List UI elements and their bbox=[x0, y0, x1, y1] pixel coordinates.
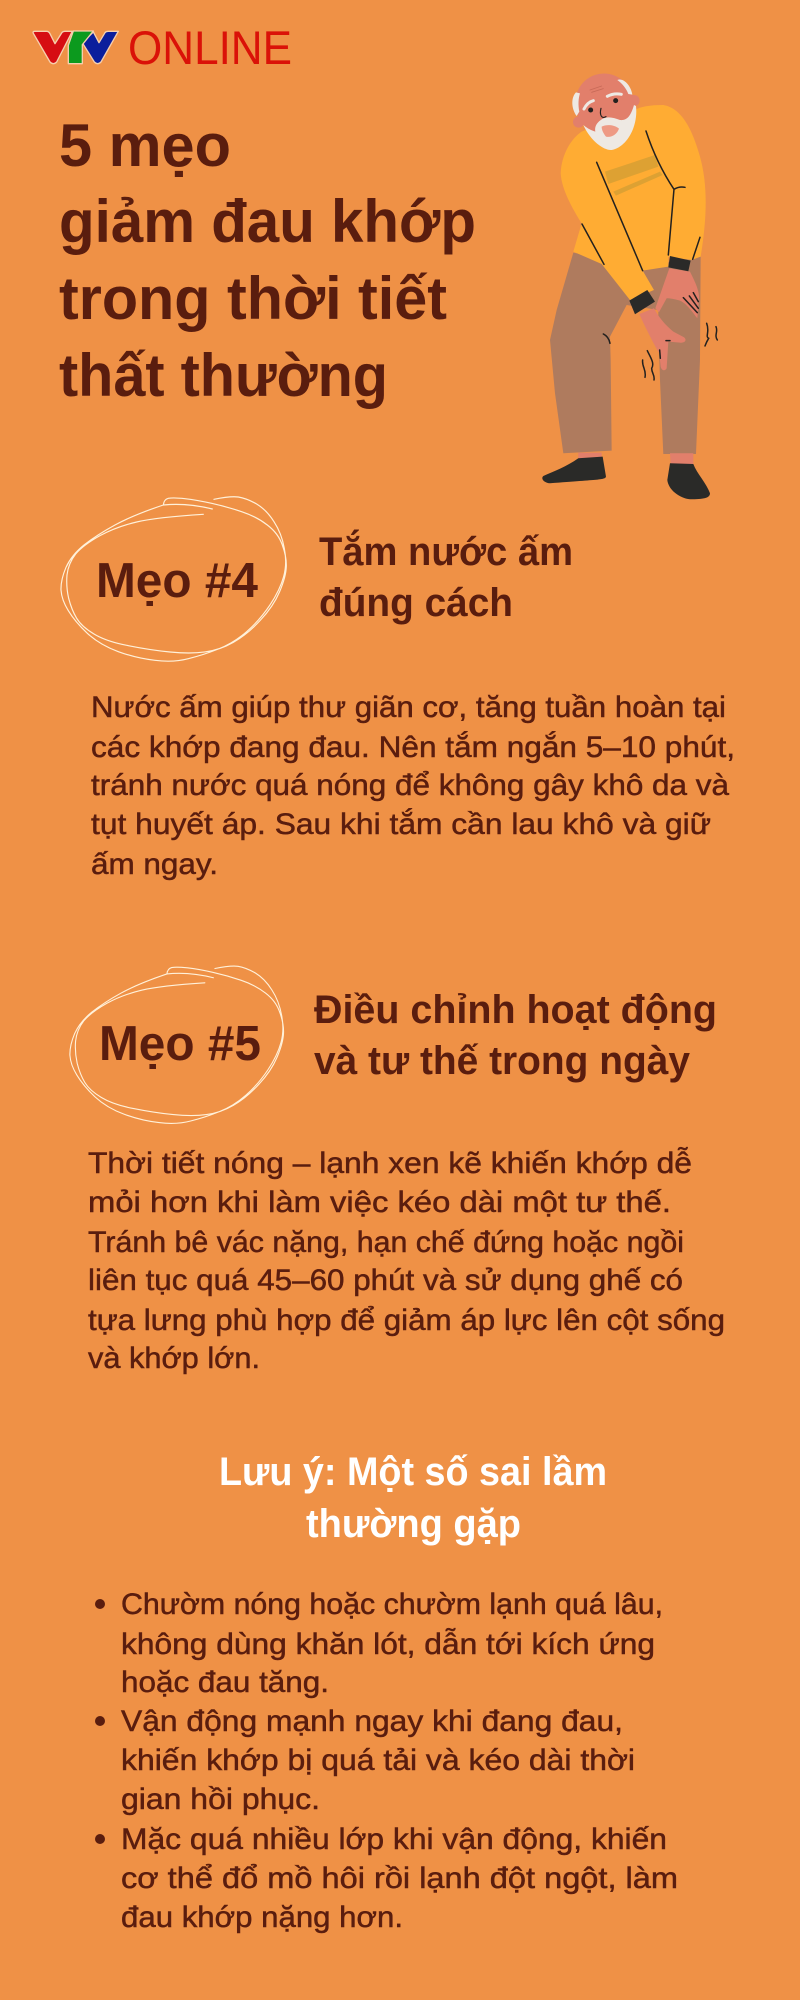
heading bbox=[219, 1450, 607, 1546]
tip text: và khớp lớn. bbox=[88, 1342, 260, 1375]
tip heading: và tư thế trong ngày bbox=[314, 1039, 691, 1083]
ankles bbox=[578, 453, 693, 465]
tip text: tựa lưng phù hợp để giảm áp lực lên cột sống bbox=[88, 1304, 725, 1337]
bullet 1: Chườm nóng hoặc chườm lạnh quá lâu, bbox=[121, 1588, 663, 1621]
tip text: mỏi hơn khi làm việc kéo dài một tư thế. bbox=[88, 1186, 671, 1219]
heading: Lưu ý: Một số sai lầm bbox=[219, 1450, 607, 1494]
trousers bbox=[550, 253, 701, 454]
tip heading bbox=[314, 988, 717, 1083]
tip text: các khớp đang đau. Nên tắm ngắn 5–10 phút, bbox=[91, 731, 735, 764]
tip text: liên tục quá 45–60 phút và sử dụng ghế có bbox=[88, 1264, 683, 1297]
wordmark: ONLINE bbox=[128, 21, 292, 74]
pain marks bbox=[603, 293, 717, 380]
panel: common mistakes bbox=[95, 1450, 678, 1934]
ears bbox=[573, 116, 584, 128]
cuffs bbox=[629, 256, 691, 314]
bullet 2 bbox=[95, 1705, 635, 1816]
icon: VTV mark bbox=[33, 31, 118, 64]
title: trong thời tiết bbox=[59, 265, 447, 332]
tip label: Mẹo #5 bbox=[99, 1017, 261, 1071]
tip text: tụt huyết áp. Sau khi tắm cần lau khô và giữ bbox=[91, 808, 711, 841]
tip text bbox=[88, 1147, 725, 1375]
tip text: Nước ấm giúp thư giãn cơ, tăng tuần hoàn tại bbox=[91, 691, 726, 724]
forehead wrinkles bbox=[590, 86, 603, 92]
head bbox=[567, 66, 642, 150]
bullet 1 bbox=[95, 1588, 663, 1699]
heading: thường gặp bbox=[306, 1502, 521, 1546]
title: thất thường bbox=[59, 342, 388, 409]
lower hand bbox=[639, 308, 686, 370]
eyes bbox=[588, 107, 593, 112]
panel: tip 4 bbox=[61, 497, 735, 881]
tip text: Tránh bê vác nặng, hạn chế đứng hoặc ngồi bbox=[88, 1226, 684, 1259]
bullet 3: Mặc quá nhiều lớp khi vận động, khiến bbox=[121, 1823, 667, 1856]
bullet 3: đau khớp nặng hơn. bbox=[121, 1901, 403, 1934]
beard bbox=[583, 105, 636, 150]
tip text bbox=[91, 691, 735, 881]
scribble circle bbox=[61, 497, 286, 661]
title bbox=[59, 112, 476, 409]
shoes bbox=[542, 457, 710, 499]
brows bbox=[584, 94, 621, 109]
tip text: Thời tiết nóng – lạnh xen kẽ khiến khớp dễ bbox=[88, 1147, 692, 1180]
tip text: tránh nước quá nóng để không gây khô da và bbox=[91, 769, 729, 802]
tip heading: đúng cách bbox=[319, 581, 513, 625]
logo: VTV Online bbox=[33, 21, 292, 74]
nose bbox=[600, 108, 606, 117]
bullet 2: Vận động mạnh ngay khi đang đau, bbox=[121, 1705, 623, 1738]
hand on thigh bbox=[655, 268, 699, 318]
title: giảm đau khớp bbox=[59, 188, 476, 255]
tip text: ấm ngay. bbox=[91, 848, 218, 881]
title: 5 mẹo bbox=[59, 112, 231, 179]
tip heading: Điều chỉnh hoạt động bbox=[314, 988, 717, 1032]
bullet 1: không dùng khăn lót, dẫn tới kích ứng bbox=[121, 1628, 655, 1661]
illustration: elderly man holding painful knee bbox=[542, 66, 717, 499]
tip heading: Tắm nước ấm bbox=[319, 528, 573, 574]
scribble circle bbox=[70, 966, 284, 1123]
bullet 2: gian hồi phục. bbox=[121, 1783, 320, 1816]
sweater stripes bbox=[605, 155, 663, 196]
bullet 3: cơ thể đổ mồ hôi rồi lạnh đột ngột, làm bbox=[121, 1862, 678, 1895]
sweater fold lines bbox=[582, 131, 700, 271]
bullet 2: khiến khớp bị quá tải và kéo dài thời bbox=[121, 1744, 635, 1777]
tip heading bbox=[319, 528, 573, 625]
tip label: Mẹo #4 bbox=[96, 554, 258, 608]
mouth bbox=[602, 125, 619, 137]
hair bbox=[572, 80, 632, 116]
bullet 1: hoặc đau tăng. bbox=[121, 1666, 329, 1699]
face bbox=[567, 66, 642, 142]
panel: tip 5 bbox=[70, 966, 725, 1375]
sweater bbox=[561, 105, 706, 300]
bullet 3 bbox=[95, 1823, 678, 1934]
